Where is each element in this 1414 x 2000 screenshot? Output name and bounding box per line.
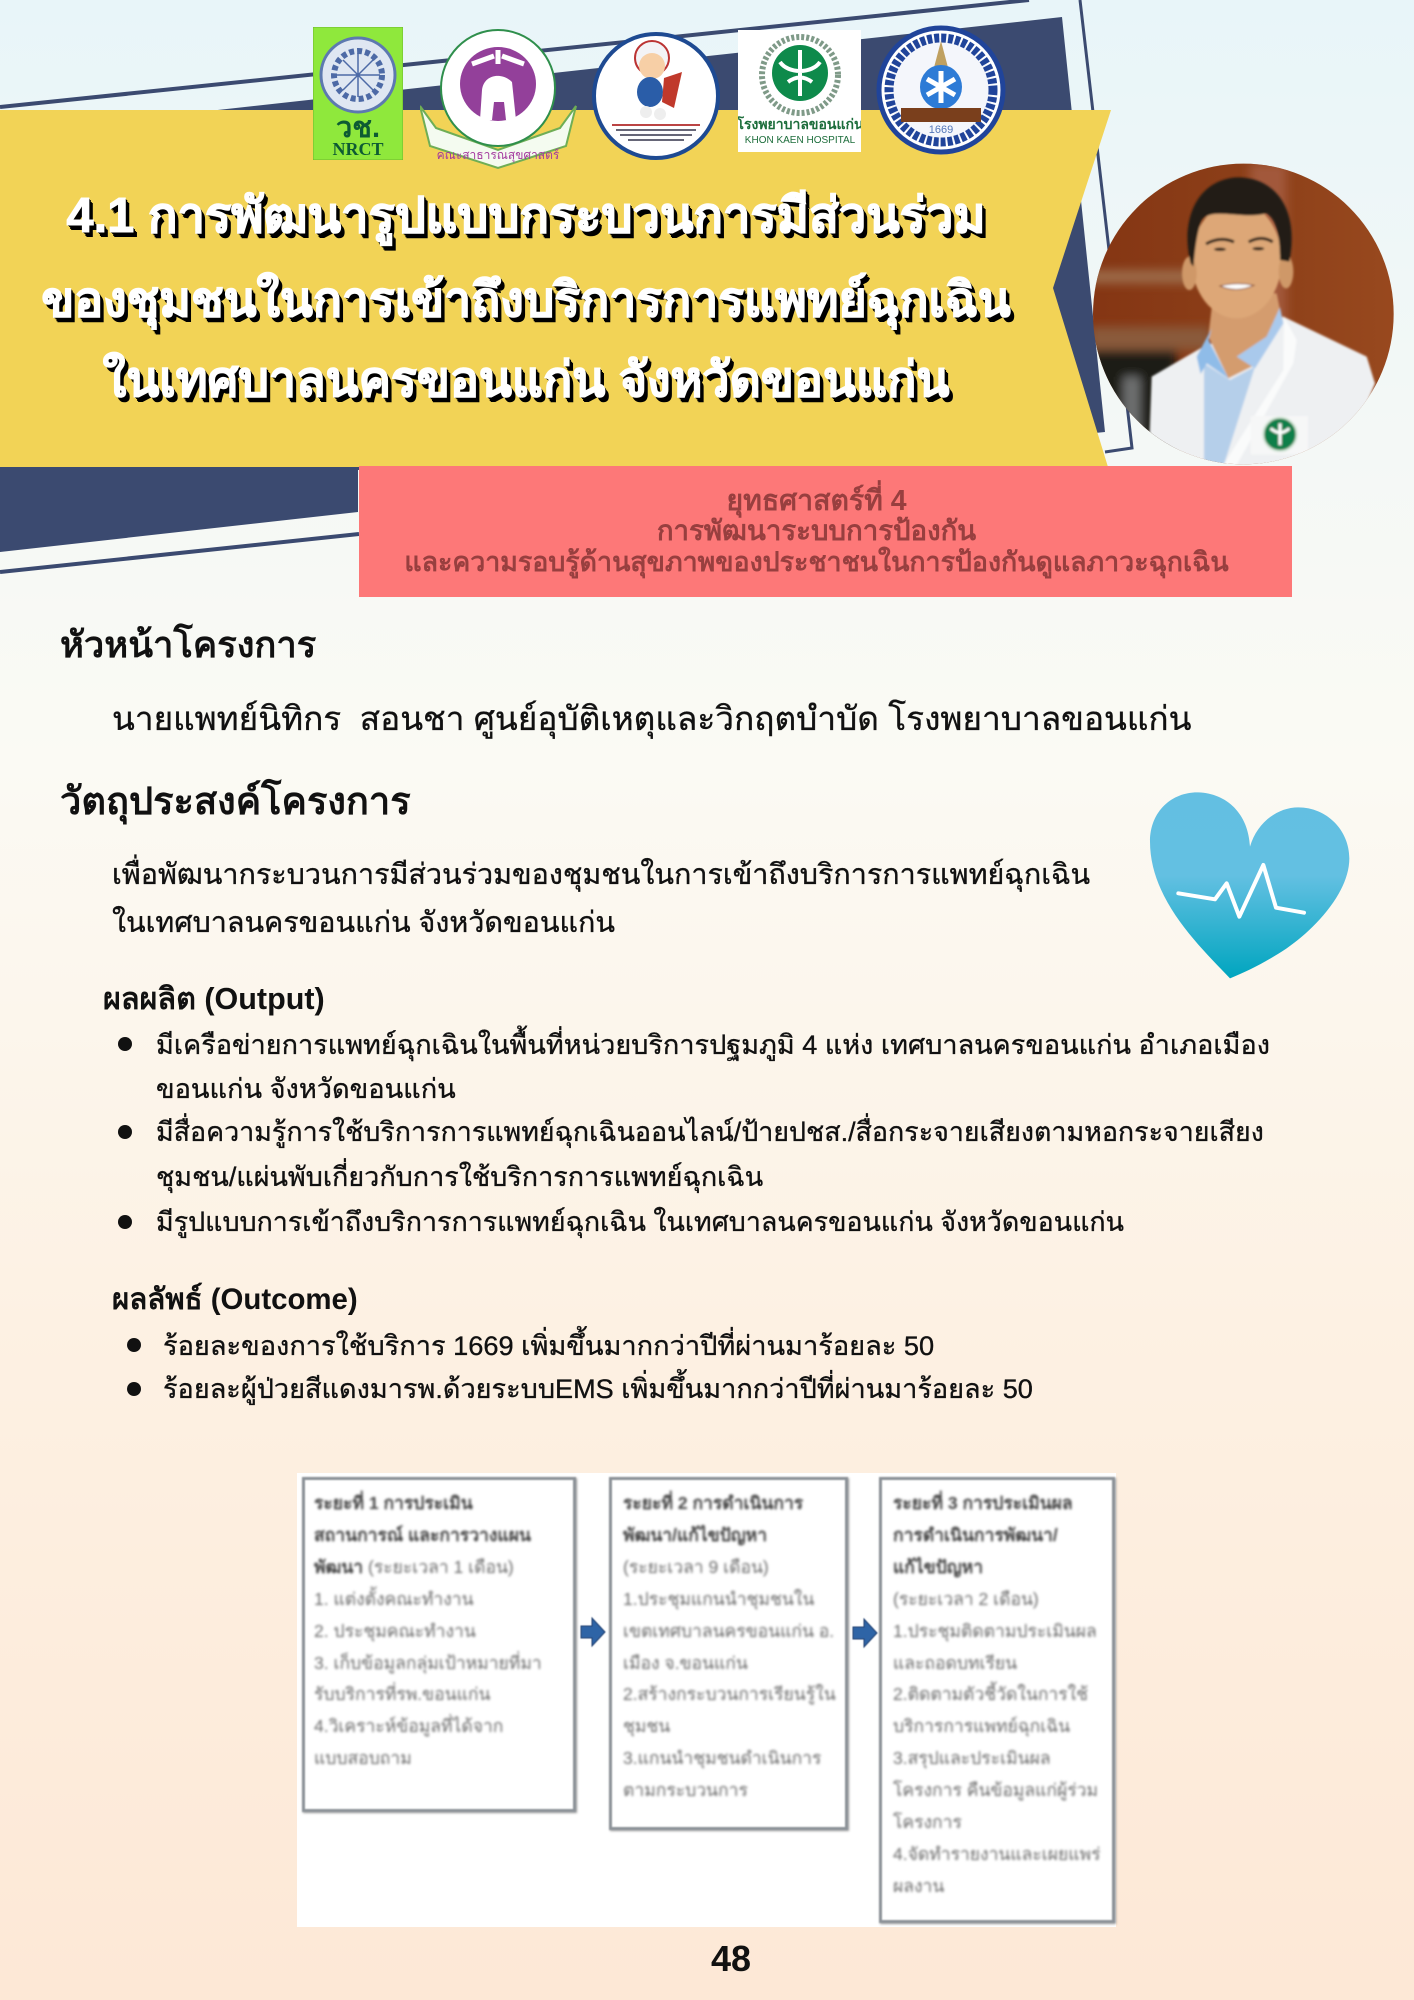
phase 2 text: เขตเทศบาลนครขอนแก่น อ. xyxy=(623,1621,834,1641)
output bullets: มีเครือข่ายการแพทย์ฉุกเฉินในพื้นที่หน่วยบริการปฐมภูมิ 4 แห่ง เทศบาลนครขอนแก่น อำเภอเมือง xyxy=(156,1029,1270,1060)
phase 1 box xyxy=(302,1477,576,1812)
logo: Chiang Mai University: คณะสาธารณสุขศาสตร์ xyxy=(437,148,560,163)
phase 3 text: การดำเนินการพัฒนา/ xyxy=(893,1525,1058,1545)
arrow 2 xyxy=(852,1618,878,1648)
phase 3 text: บริการการแพทย์ฉุกเฉิน xyxy=(893,1716,1070,1736)
phase 1 text: สถานการณ์ และการวางแผน xyxy=(314,1525,531,1545)
phase 1 text: พัฒนา (ระยะเวลา 1 เดือน) xyxy=(314,1557,514,1577)
phase 3 text: โครงการ คืนข้อมูลแก่ผู้ร่วม xyxy=(893,1780,1098,1800)
outcome bullets: ร้อยละของการใช้บริการ 1669 เพิ่มขึ้นมากกว่าปีที่ผ่านมาร้อยละ 50 xyxy=(163,1330,934,1361)
logo: NRCT: NRCT xyxy=(332,139,384,159)
phase 1 text: ระยะที่ 1 การประเมิน xyxy=(314,1493,473,1513)
project lead name: นายแพทย์นิทิกร สอนชา ศูนย์อุบัติเหตุและวิกฤตบำบัด โรงพยาบาลขอนแก่น xyxy=(112,701,1191,738)
phase 2 text: ชุมชน xyxy=(623,1716,670,1736)
phase 2 text: พัฒนา/แก้ไขปัญหา xyxy=(623,1525,767,1545)
logo: NRCT xyxy=(313,27,403,160)
logo: Chiang Mai University xyxy=(420,29,577,169)
background shapes xyxy=(0,0,1134,574)
phase 3 text: 4.จัดทำรายงานและเผยแพร่ xyxy=(893,1844,1100,1864)
logo: Khon Kaen Hospital xyxy=(738,30,861,152)
title: 4.1 การพัฒนารูปแบบกระบวนการมีส่วนร่วม xyxy=(66,189,986,243)
process diagram xyxy=(297,1473,1116,1927)
strategy text xyxy=(404,480,1229,578)
phase 3 box xyxy=(879,1477,1115,1923)
title xyxy=(41,189,1014,407)
phase 1 text: 1. แต่งตั้งคณะทำงาน xyxy=(314,1589,474,1609)
title: ของชุมชนในการเข้าถึงบริการการแพทย์ฉุกเฉิน xyxy=(41,273,1011,327)
output bullets: ชุมชน/แผ่นพับเกี่ยวกับการใช้บริการการแพทย์ฉุกเฉิน xyxy=(156,1162,763,1192)
strategy text: การพัฒนาระบบการป้องกัน xyxy=(657,515,976,546)
phase 3 text: โครงการ xyxy=(893,1812,962,1832)
phase 1 text: รับบริการที่รพ.ขอนแก่น xyxy=(314,1684,490,1704)
phase 2 box xyxy=(609,1477,848,1830)
phase 3 text: (ระยะเวลา 2 เดือน) xyxy=(893,1589,1039,1609)
phase 3 text: 1.ประชุมติดตามประเมินผล xyxy=(893,1621,1097,1641)
icon: heart xyxy=(1150,792,1350,978)
phase 1 text: แบบสอบถาม xyxy=(314,1748,412,1768)
phase 3 text: ระยะที่ 3 การประเมินผล xyxy=(893,1493,1073,1513)
strategy text: และความรอบรู้ด้านสุขภาพของประชาชนในการป้องกันดูแลภาวะฉุกเฉิน xyxy=(404,547,1229,577)
strategy box xyxy=(359,466,1292,597)
objective text xyxy=(112,854,1090,939)
heading: output: ผลผลิต (Output) xyxy=(103,982,325,1016)
phase 1 text xyxy=(312,1489,542,1768)
phase 2 text: ระยะที่ 2 การดำเนินการ xyxy=(623,1493,803,1513)
phase 3 text: แก้ไขปัญหา xyxy=(893,1557,983,1577)
logo: emergency medical service foundation: 1669 xyxy=(929,124,953,136)
output bullets xyxy=(118,1025,1270,1238)
phase 2 text: เมือง จ.ขอนแก่น xyxy=(623,1653,748,1673)
heading: outcome: ผลลัพธ์ (Outcome) xyxy=(112,1283,358,1316)
text: ในเทศบาลนครขอนแก่น จังหวัดขอนแก่น xyxy=(112,907,615,939)
phase 3 text: และถอดบทเรียน xyxy=(893,1653,1017,1673)
title: ในเทศบาลนครขอนแก่น จังหวัดขอนแก่น xyxy=(103,353,949,407)
phase 2 text: 3.แกนนำชุมชนดำเนินการ xyxy=(623,1748,821,1768)
outcome bullets xyxy=(127,1326,1033,1406)
doctor portrait xyxy=(1093,164,1394,464)
text: เพื่อพัฒนากระบวนการมีส่วนร่วมของชุมชนในการเข้าถึงบริการการแพทย์ฉุกเฉิน xyxy=(112,859,1090,891)
arrow 1 xyxy=(580,1616,606,1648)
logo: emergency medical service foundation xyxy=(876,26,1006,154)
logo: mascot xyxy=(592,32,720,160)
logo: Khon Kaen Hospital: KHON KAEN HOSPITAL xyxy=(745,135,856,146)
phase 1 text: 3. เก็บข้อมูลกลุ่มเป้าหมายที่มา xyxy=(314,1653,542,1673)
heading: objective: วัตถุประสงค์โครงการ xyxy=(60,781,411,823)
outcome bullets: ร้อยละผู้ป่วยสีแดงมารพ.ด้วยระบบEMS เพิ่มขึ้นมากกว่าปีที่ผ่านมาร้อยละ 50 xyxy=(163,1373,1033,1404)
heading: project lead: หัวหน้าโครงการ xyxy=(60,624,316,665)
phase 3 text: 3.สรุปและประเมินผล xyxy=(893,1748,1051,1768)
phase 2 text: 1.ประชุมแกนนำชุมชนใน xyxy=(623,1589,814,1609)
phase 3 text xyxy=(892,1489,1101,1896)
page number: 48 xyxy=(711,1938,751,1979)
phase 3 text: 2.ติดตามตัวชี้วัดในการใช้ xyxy=(893,1684,1088,1704)
phase 2 text: 2.สร้างกระบวนการเรียนรู้ใน xyxy=(623,1684,836,1704)
output bullets: ขอนแก่น จังหวัดขอนแก่น xyxy=(156,1073,456,1104)
phase 2 text: (ระยะเวลา 9 เดือน) xyxy=(623,1557,769,1577)
output bullets: มีสื่อความรู้การใช้บริการการแพทย์ฉุกเฉินออนไลน์/ป้ายปชส./สื่อกระจายเสียงตามหอกระจายเสียง xyxy=(156,1117,1264,1147)
logo: NRCT: วช. xyxy=(336,112,380,144)
phase 2 text: ตามกระบวนการ xyxy=(623,1780,748,1800)
phase 1 text: 4.วิเคราะห์ข้อมูลที่ได้จาก xyxy=(314,1716,503,1736)
strategy text: ยุทธศาสตร์ที่ 4 xyxy=(726,485,907,517)
phase 1 text: 2. ประชุมคณะทำงาน xyxy=(314,1621,476,1641)
phase 3 text: ผลงาน xyxy=(893,1876,944,1896)
phase 2 text xyxy=(621,1489,837,1800)
output bullets: มีรูปแบบการเข้าถึงบริการการแพทย์ฉุกเฉิน ในเทศบาลนครขอนแก่น จังหวัดขอนแก่น xyxy=(156,1207,1124,1237)
